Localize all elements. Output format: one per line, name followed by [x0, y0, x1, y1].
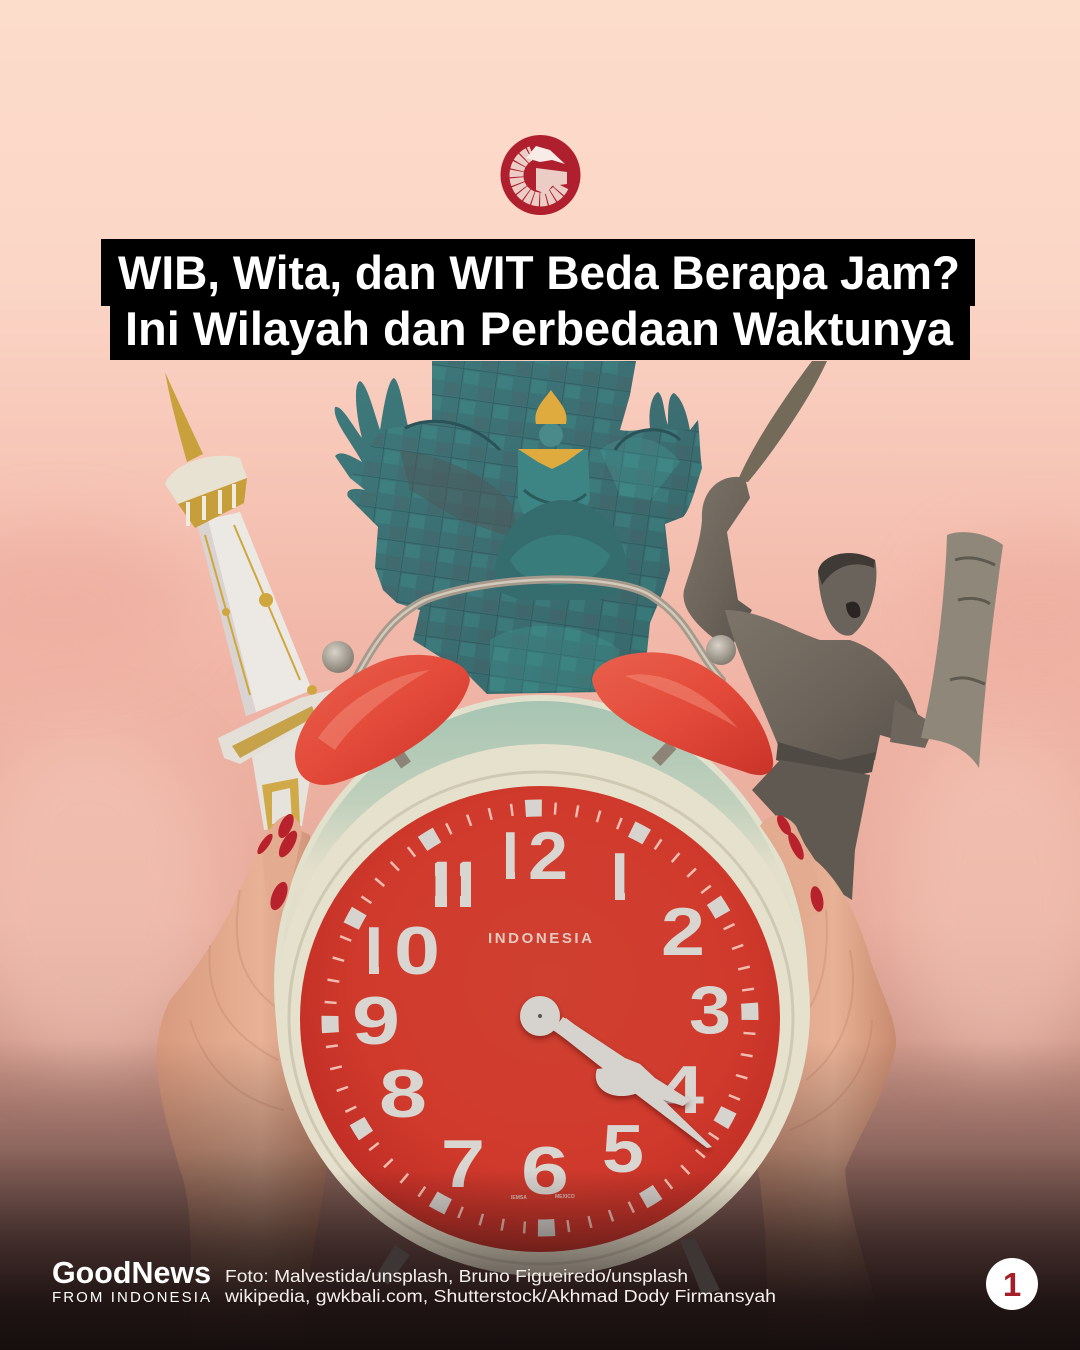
photo credits: Foto: Malvestida/unsplash, Bruno Figueiredo/unsplash — [225, 1266, 688, 1286]
wing shadow patches — [400, 450, 520, 540]
clock hands — [520, 996, 712, 1148]
waist sash — [776, 742, 876, 780]
gold ornaments — [205, 525, 317, 695]
title line 2: Ini Wilayah dan Perbedaan Waktunya — [125, 302, 954, 355]
head — [818, 553, 876, 636]
title line 1: WIB, Wita, dan WIT Beda Berapa Jam? — [118, 246, 960, 299]
base band — [218, 688, 338, 764]
clock back body — [277, 698, 805, 1272]
wing arcs — [405, 421, 680, 450]
clock numerals: 5 — [602, 1111, 644, 1187]
page number badge: 1 — [1003, 1266, 1021, 1303]
right bell — [592, 652, 773, 775]
title banner — [101, 239, 975, 360]
gold doorway — [262, 778, 300, 830]
brand: GoodNews from Indonesia: GoodNews — [52, 1255, 211, 1290]
small dial print: MEXICO — [555, 1194, 575, 1200]
shield — [921, 532, 1003, 768]
dial label: INDONESIA — [488, 930, 592, 947]
Garuda head — [494, 500, 628, 600]
illustration: left hand behind clock — [157, 822, 330, 1350]
torso — [725, 610, 918, 765]
clock numerals: 7 — [441, 1126, 485, 1202]
small dial print: IEMSA — [511, 1195, 527, 1201]
gold collar — [518, 449, 584, 469]
clock feet — [376, 1238, 720, 1295]
clock numerals: 12 — [488, 818, 568, 894]
left bell knob — [322, 641, 354, 673]
minute ticks ring — [324, 802, 756, 1234]
brand: GoodNews from Indonesia — [52, 1255, 211, 1306]
bell posts — [392, 745, 672, 765]
right bell knob — [706, 635, 736, 665]
clock numerals: 2 — [661, 894, 705, 970]
machete — [738, 361, 827, 482]
shield arm — [890, 700, 935, 748]
bottom dark fade — [0, 1040, 1080, 1350]
illustration: Garuda Wisnu Kencana statue — [335, 361, 702, 694]
capital — [165, 456, 247, 504]
clock numerals: 10 — [348, 913, 440, 989]
clock rim — [276, 744, 810, 1276]
hour markers ring — [324, 802, 756, 1234]
illustration: right hand behind clock — [740, 822, 896, 1350]
right hand fingertips with red nails — [760, 813, 826, 918]
bell handle — [350, 579, 722, 688]
left hand fingertips with red nails — [255, 812, 302, 915]
raised arm — [683, 477, 752, 650]
Wisnu figure — [518, 450, 590, 525]
feather tile texture — [348, 361, 702, 694]
clock numerals: 1 — [588, 839, 642, 915]
clock numerals: 4 — [658, 1052, 704, 1128]
gold crown — [535, 390, 567, 424]
photo credits — [224, 1266, 776, 1306]
illustration: Bambu Runcing hero statue — [683, 361, 1003, 900]
page number badge — [986, 1258, 1038, 1310]
spire — [165, 372, 203, 462]
illustration: Tugu Yogyakarta monument — [165, 372, 338, 830]
footer — [52, 1255, 1038, 1310]
rim bottom shade — [276, 744, 810, 1276]
clock numerals: 11 — [426, 852, 480, 918]
small dial print — [511, 1194, 575, 1201]
statue silhouette — [335, 361, 702, 694]
illustration: alarm clock — [276, 579, 810, 1295]
photo credits: wikipedia, gwkbali.com, Shutterstock/Akhmad Dody Firmansyah — [224, 1286, 776, 1306]
clock numerals: 8 — [379, 1056, 427, 1132]
logo: Garuda G emblem — [500, 135, 580, 215]
clock face — [300, 786, 780, 1252]
left bell — [295, 655, 470, 785]
legs — [752, 760, 870, 900]
clock numerals: 9 — [352, 983, 400, 1059]
clock numerals: 3 — [689, 972, 731, 1048]
monument shaft — [197, 512, 312, 716]
clock numerals — [348, 818, 731, 1209]
clock numerals: 6 — [521, 1133, 569, 1209]
brand: GoodNews from Indonesia: FROM INDONESIA — [52, 1289, 210, 1306]
